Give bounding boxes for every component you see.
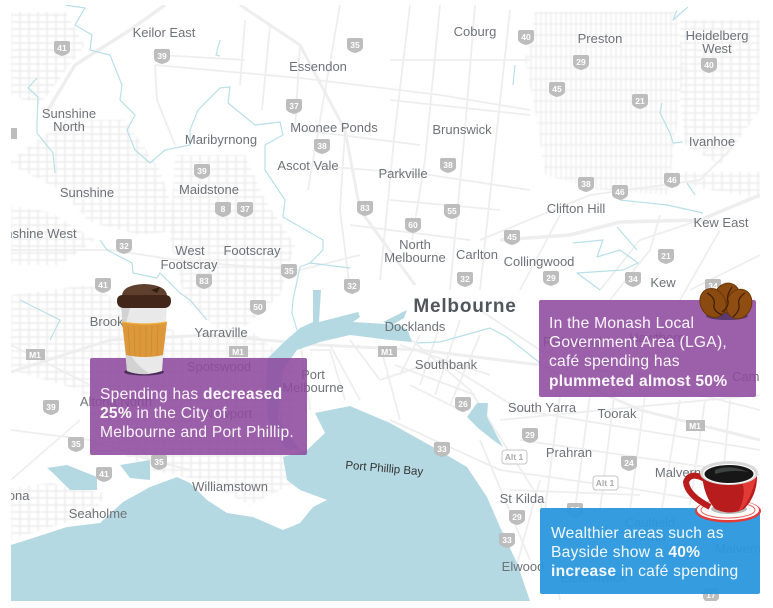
place labels: South Yarra	[508, 400, 577, 415]
road shields: 25	[570, 505, 580, 515]
road shields: 41	[98, 280, 108, 290]
place labels: Newport	[204, 406, 253, 421]
place labels: St Kilda	[500, 491, 545, 506]
road shields: 39	[46, 402, 56, 412]
place labels: Kew East	[694, 215, 749, 230]
callout: Monash LGA: Government Area (LGA),	[549, 334, 727, 351]
place labels: Ascot Vale	[277, 158, 339, 173]
road shields: 39	[197, 166, 207, 176]
callout: Monash LGA: café spending has	[549, 353, 680, 370]
place labels: Port Phillip Bay	[345, 460, 424, 478]
place labels: Carlton	[456, 247, 498, 262]
place labels: Southbank	[415, 357, 478, 372]
place labels: Docklands	[385, 319, 446, 334]
road shields: 46	[667, 175, 677, 185]
road shields: 55	[447, 206, 457, 216]
water: Yarra docks	[266, 290, 412, 450]
callout: Monash LGA: plummeted almost 50%	[549, 373, 727, 390]
road shields: 29	[546, 273, 556, 283]
place labels: Yarraville	[194, 325, 248, 340]
road shields: 40	[704, 60, 714, 70]
road shields: 37	[289, 101, 299, 111]
place labels: Prahran	[546, 445, 592, 460]
road shields: 33	[437, 444, 447, 454]
place labels: West	[175, 243, 205, 258]
place labels: Melbourne	[282, 380, 344, 395]
place labels: Malvern	[655, 465, 701, 480]
road shields: 21	[635, 96, 645, 106]
place labels: Hawthorn	[629, 330, 685, 345]
road shields: M1	[381, 347, 393, 357]
place labels: Richmond	[543, 334, 602, 349]
place labels: Essendon	[289, 59, 347, 74]
road shields: 83	[199, 276, 209, 286]
road shields: Alt 1	[505, 452, 523, 462]
water: Altona lagoon	[47, 460, 150, 490]
road shields: 26	[458, 399, 468, 409]
callout: City of Melbourne and Port Phillip: Melbourne and Port Phillip.	[100, 424, 294, 441]
road shields: 24	[624, 458, 634, 468]
road shields: 45	[552, 84, 562, 94]
place labels: Keilor East	[133, 25, 196, 40]
place labels: Sunshine	[42, 106, 96, 121]
place labels: Maidstone	[179, 182, 239, 197]
road shields: 29	[525, 430, 535, 440]
place labels: Coburg	[454, 24, 496, 39]
icon: takeaway coffee cup	[117, 284, 171, 376]
road shields: 35	[350, 40, 360, 50]
place labels: Clifton Hill	[547, 201, 605, 216]
place labels: Williamstown	[192, 479, 268, 494]
road shields: 37	[240, 204, 250, 214]
place labels: North	[53, 119, 85, 134]
road shields: 29	[512, 512, 522, 522]
rivers	[20, 5, 703, 363]
road shields: 35	[284, 266, 294, 276]
place labels: Melbourne	[384, 250, 446, 265]
road shields: 39	[157, 51, 167, 61]
road shields: 32	[347, 281, 357, 291]
road shields: 35	[71, 439, 81, 449]
water: Albert Park lake	[467, 403, 503, 447]
place labels: Brunswick	[432, 122, 492, 137]
road shields: 45	[507, 232, 517, 242]
place labels: Toorak	[597, 406, 637, 421]
road shields: 32	[119, 241, 129, 251]
place labels: Elsternwick	[560, 570, 626, 585]
road shields: 50	[253, 302, 263, 312]
callout: Bayside: Wealthier areas such as	[551, 525, 724, 542]
callout: Bayside: increase in café spending	[551, 563, 738, 580]
place labels: Spotswood	[187, 359, 251, 374]
place labels: Altona North	[80, 394, 152, 409]
road shields: 38	[581, 179, 591, 189]
place labels: North	[634, 529, 666, 544]
place labels: North	[399, 237, 431, 252]
place labels: Collingwood	[504, 254, 574, 269]
place labels: Heidelberg	[686, 28, 748, 43]
road shields: 35	[154, 457, 164, 467]
road shields: 41	[57, 43, 67, 53]
road shields: 8	[221, 204, 226, 214]
road shields: 32	[460, 274, 470, 284]
road shields: 21	[661, 251, 671, 261]
place labels: Port	[301, 367, 325, 382]
callout: Bayside: Bayside show a 40%	[551, 544, 700, 561]
road shields: 41	[99, 469, 109, 479]
callout: City of Melbourne and Port Phillip: Spending has decreased	[100, 386, 282, 403]
road shields: Alt 1	[596, 478, 614, 488]
road shields: 34	[708, 281, 718, 291]
callout: City of Melbourne and Port Phillip: 25% in the City of	[100, 405, 227, 422]
place labels: Elwood	[502, 559, 544, 574]
place labels: Parkville	[378, 166, 428, 181]
place labels: West	[702, 41, 732, 56]
callout: Bayside	[540, 508, 760, 594]
road shields: 38	[443, 160, 453, 170]
road shields: M1	[29, 350, 41, 360]
place labels: Caulfield	[625, 515, 675, 530]
place labels: Footscray	[223, 243, 281, 258]
place labels: Melbourne	[413, 296, 517, 317]
road shields: 46	[615, 187, 625, 197]
road shields: 38	[317, 141, 327, 151]
place labels: Ivanhoe	[689, 134, 735, 149]
place labels: Brooklyn	[90, 314, 140, 329]
place labels: Maribyrnong	[185, 132, 257, 147]
road shields: 17	[706, 590, 716, 600]
place labels: Moonee Ponds	[290, 120, 378, 135]
place labels: Footscray	[160, 257, 218, 272]
place labels: Sunshine	[60, 185, 114, 200]
callout: Monash LGA: In the Monash Local	[549, 315, 694, 332]
road shields: M1	[689, 421, 701, 431]
road shields: 83	[360, 203, 370, 213]
road shields: 34	[628, 274, 638, 284]
road shields: 29	[576, 57, 586, 67]
road shields: M1	[232, 347, 244, 357]
road shields: 40	[521, 32, 531, 42]
place labels: Seaholme	[69, 506, 127, 521]
road shields: 60	[408, 220, 418, 230]
place labels: Kew	[650, 275, 676, 290]
callout: Monash LGA	[539, 300, 756, 397]
road shields: 33	[502, 535, 512, 545]
place labels: Preston	[578, 31, 622, 46]
icon: red coffee cup	[686, 461, 761, 522]
icon: coffee beans	[695, 280, 756, 323]
water: Port Phillip Bay	[11, 406, 530, 601]
callout: City of Melbourne and Port Phillip	[90, 358, 307, 455]
